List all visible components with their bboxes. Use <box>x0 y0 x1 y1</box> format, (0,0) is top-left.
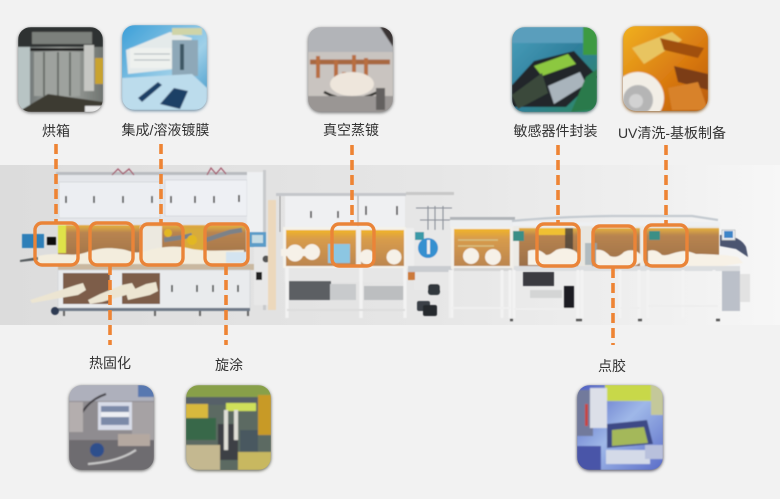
label: oven: 烘箱 <box>42 123 70 139</box>
photo tile: vacuum evaporation <box>308 27 393 113</box>
unit 4: long glovebox <box>510 216 750 320</box>
photo tile: sensitive device encapsulation <box>512 27 598 113</box>
unit 3: glovebox <box>450 217 515 318</box>
lower gloves <box>30 282 158 304</box>
photo tile: UV cleaning and substrate preparation <box>620 24 711 115</box>
unit 3 gloves <box>463 248 501 265</box>
dashed connector lines <box>56 144 666 345</box>
touch screen <box>249 232 266 247</box>
label: UV cleaning and substrate preparation: UV清洗-基板制备 <box>618 125 726 141</box>
unit 1: large glovebox <box>20 168 274 316</box>
label: thermal curing: 热固化 <box>89 355 131 371</box>
label: spin coating: 旋涂 <box>215 357 243 373</box>
photo tile: thermal curing <box>69 385 154 471</box>
label: dispensing: 点胶 <box>598 358 626 374</box>
blue box <box>22 234 44 248</box>
photo tile: dispensing <box>577 385 663 471</box>
unit 4 gloves <box>528 248 743 266</box>
unit 2 gloves <box>281 244 402 264</box>
lower body <box>58 264 254 270</box>
photo tile: oven <box>18 27 103 113</box>
label: sensitive device encapsulation: 敏感器件封装 <box>514 123 598 139</box>
photo tile: spin coating <box>186 385 271 471</box>
photo tile: integrated solution coating <box>122 25 207 111</box>
upper panels <box>59 180 247 218</box>
label: integrated solution coating: 集成/溶液镀膜 <box>122 122 209 138</box>
unit 2: vacuum evaporation glovebox <box>276 193 406 318</box>
orange process highlight boxes <box>35 223 687 267</box>
label: vacuum evaporation: 真空蒸镀 <box>323 122 379 138</box>
glovebox window <box>58 225 246 264</box>
central plumbing and blue vessel <box>406 192 454 318</box>
grey band behind production line <box>0 165 780 325</box>
upper gloves <box>38 247 244 264</box>
production line machine <box>20 168 750 320</box>
control column <box>254 247 274 305</box>
